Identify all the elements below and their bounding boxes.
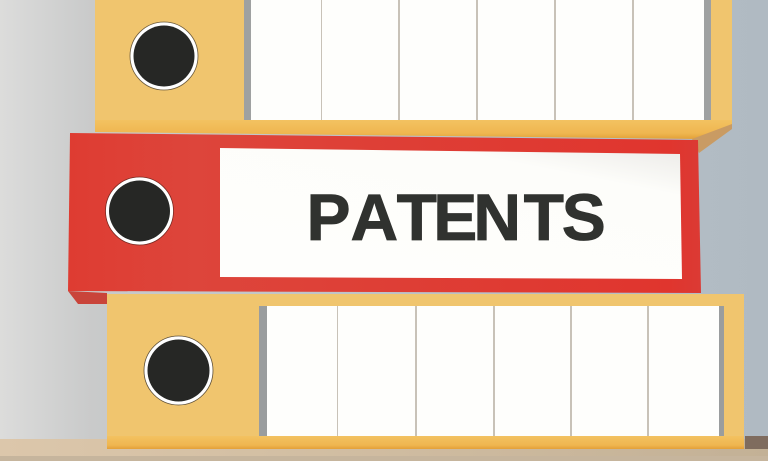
label panels: bottom binder bbox=[267, 306, 719, 436]
patents label bbox=[220, 148, 682, 279]
wooden shelf bbox=[0, 436, 768, 461]
red patents binder bbox=[68, 133, 701, 304]
bottom yellow binder bbox=[107, 294, 744, 449]
label panels: top binder bbox=[251, 0, 704, 120]
title text: PATENTS bbox=[306, 180, 606, 254]
spine hole: red binder bbox=[106, 177, 174, 245]
top yellow binder bbox=[95, 0, 732, 153]
spine hole: bottom binder bbox=[144, 336, 213, 405]
spine hole: top binder bbox=[130, 22, 198, 90]
